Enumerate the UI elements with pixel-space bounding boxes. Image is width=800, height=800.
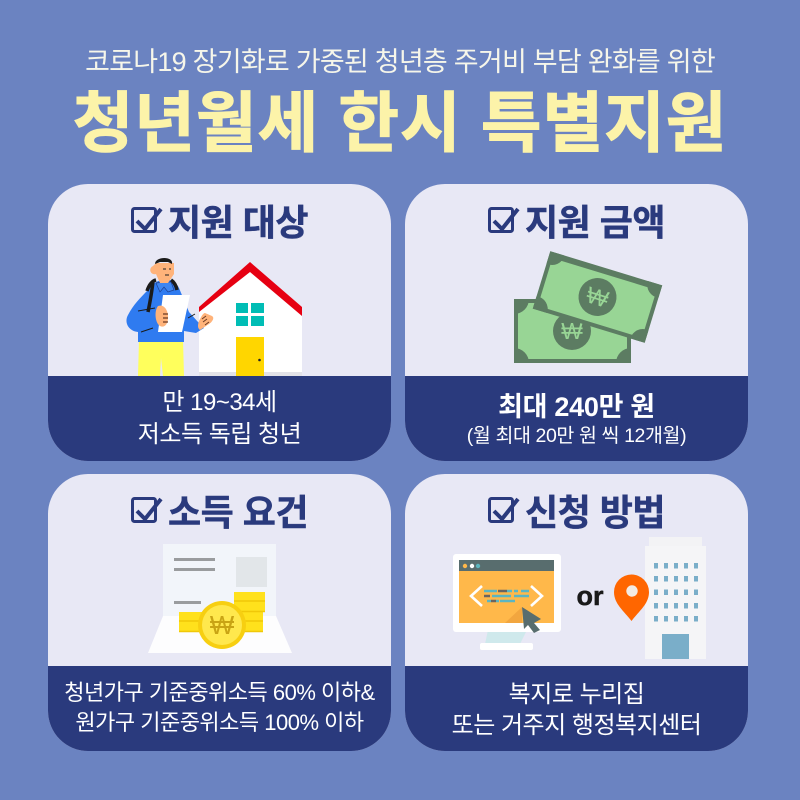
info band: 만 19~34세 [162, 389, 277, 416]
icon: banknotes: ₩ [561, 318, 583, 344]
heading: application: 신청 방법 [525, 492, 665, 533]
heading: target: 지원 대상 [168, 202, 308, 243]
panel: application [405, 474, 748, 751]
panel: target [48, 184, 391, 461]
info band [48, 376, 391, 461]
illustration: document and coins: ₩ [210, 610, 235, 640]
info band: 청년가구 기준중위소득 60% 이하& [64, 680, 375, 705]
illustration: document and coins [148, 544, 292, 653]
illustration: person and house [126, 258, 302, 376]
info band [405, 376, 748, 461]
illustration: monitor, pin and building [453, 537, 706, 659]
info band [405, 666, 748, 751]
info band: 복지로 누리집 [509, 681, 644, 708]
heading: income: 소득 요건 [168, 492, 308, 533]
info band: 최대 240만 원 [498, 392, 655, 422]
title: 청년월세 한시 특별지원 [73, 86, 727, 160]
info band: 저소득 독립 청년 [138, 421, 301, 448]
building [649, 537, 702, 547]
icon: banknotes [514, 251, 662, 363]
info band [48, 666, 391, 751]
person [138, 340, 184, 376]
icon: banknotes: ₩ [583, 281, 612, 313]
monitor [485, 630, 527, 644]
house [199, 268, 302, 372]
info band: 또는 거주지 행정복지센터 [452, 712, 701, 739]
subtitle: 코로나19 장기화로 가중된 청년층 주거비 부담 완화를 위한 [85, 47, 715, 77]
location pin [614, 574, 649, 621]
info band: (월 최대 20만 원 씩 12개월) [467, 425, 686, 447]
panel: amount [405, 184, 748, 461]
heading: amount: 지원 금액 [525, 202, 665, 243]
or: or [576, 581, 604, 611]
panel: income [48, 474, 391, 751]
info band: 원가구 기준중위소득 100% 이하 [75, 710, 364, 735]
